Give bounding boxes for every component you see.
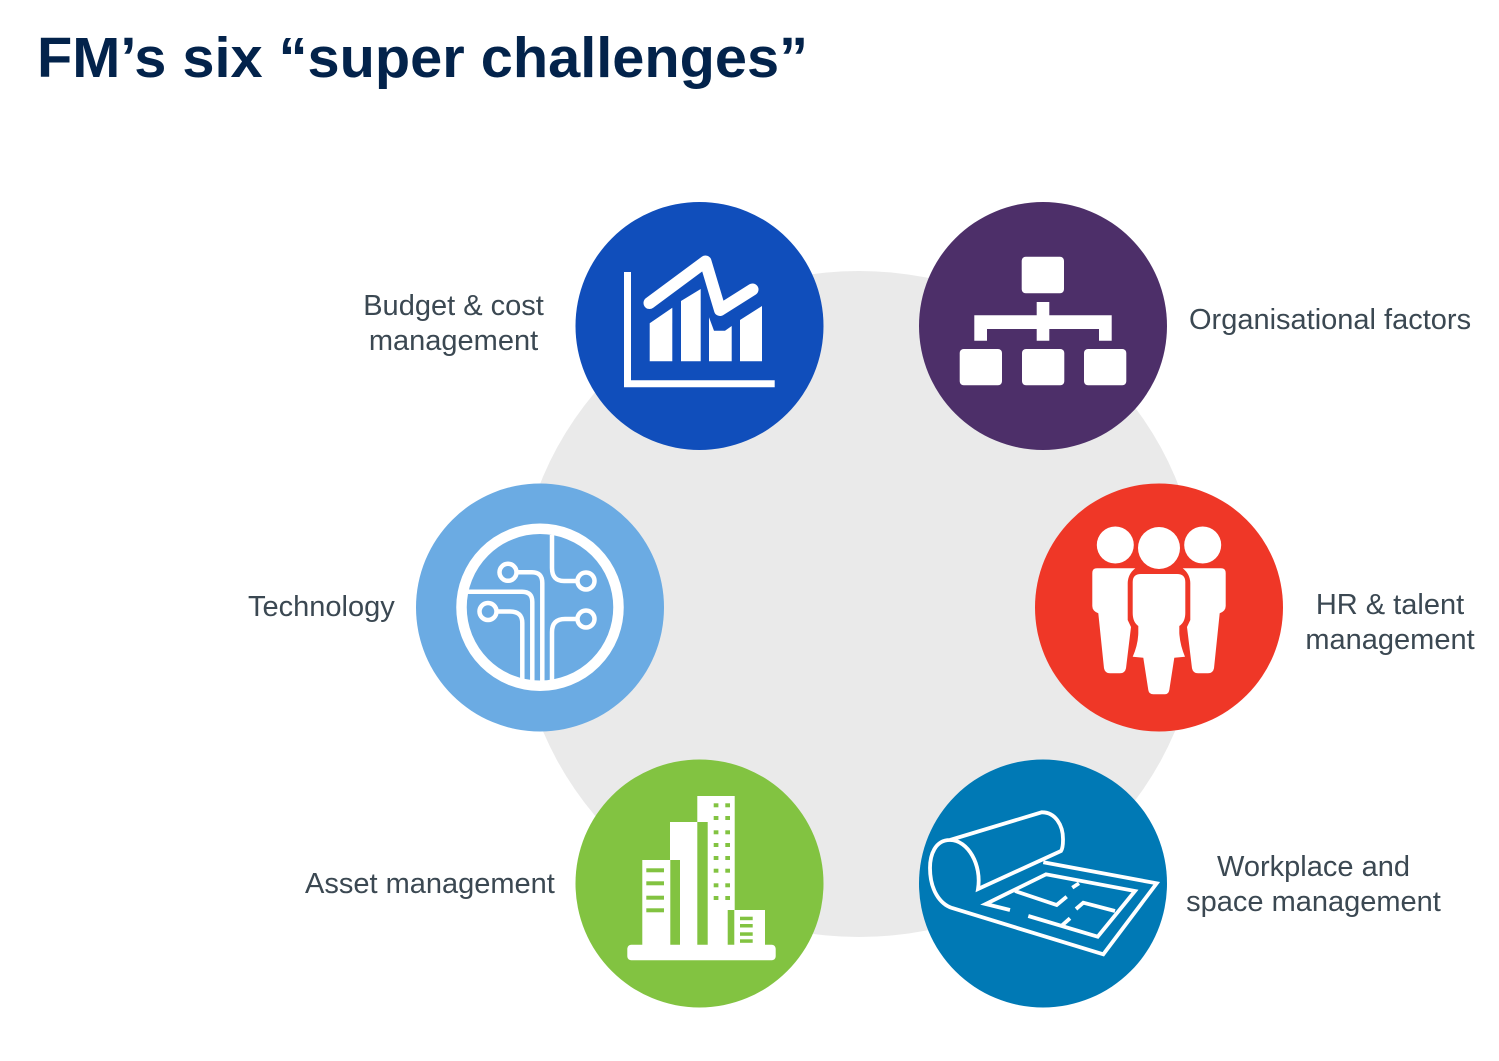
title: FM’s six “super challenges” — [37, 26, 808, 90]
circle: asset — [576, 760, 824, 1008]
panel: budget and cost management — [363, 202, 824, 450]
icon: circuit — [462, 529, 618, 686]
circle: HR — [1035, 484, 1283, 732]
circle: technology — [416, 484, 664, 732]
label: budget: Budget & cost — [363, 290, 544, 322]
panel: organisational factors — [919, 202, 1471, 450]
label: workplace: space management — [1186, 886, 1441, 918]
label: workplace: Workplace and — [1217, 851, 1410, 883]
icon: bar chart with trend line — [624, 262, 775, 387]
icon: city buildings — [627, 796, 776, 960]
label: organisational: Organisational factors — [1189, 304, 1471, 336]
panel: asset management — [305, 760, 824, 1008]
label: technology: Technology — [248, 591, 395, 623]
icon: three people — [1092, 526, 1226, 694]
panel: technology — [248, 484, 664, 732]
icon: organisation chart — [960, 257, 1126, 385]
circle: organisational — [919, 202, 1167, 450]
background ellipse — [517, 271, 1201, 937]
label: HR: HR & talent — [1316, 589, 1464, 621]
panel: workplace and space management — [919, 760, 1441, 1008]
label: asset: Asset management — [305, 868, 555, 900]
label: HR: management — [1305, 624, 1475, 656]
circle: budget — [576, 202, 824, 450]
circle: workplace — [919, 760, 1167, 1008]
icon: rolled floor plan — [930, 812, 1157, 954]
label: budget: management — [369, 325, 538, 357]
panel: HR and talent management — [1035, 484, 1475, 732]
